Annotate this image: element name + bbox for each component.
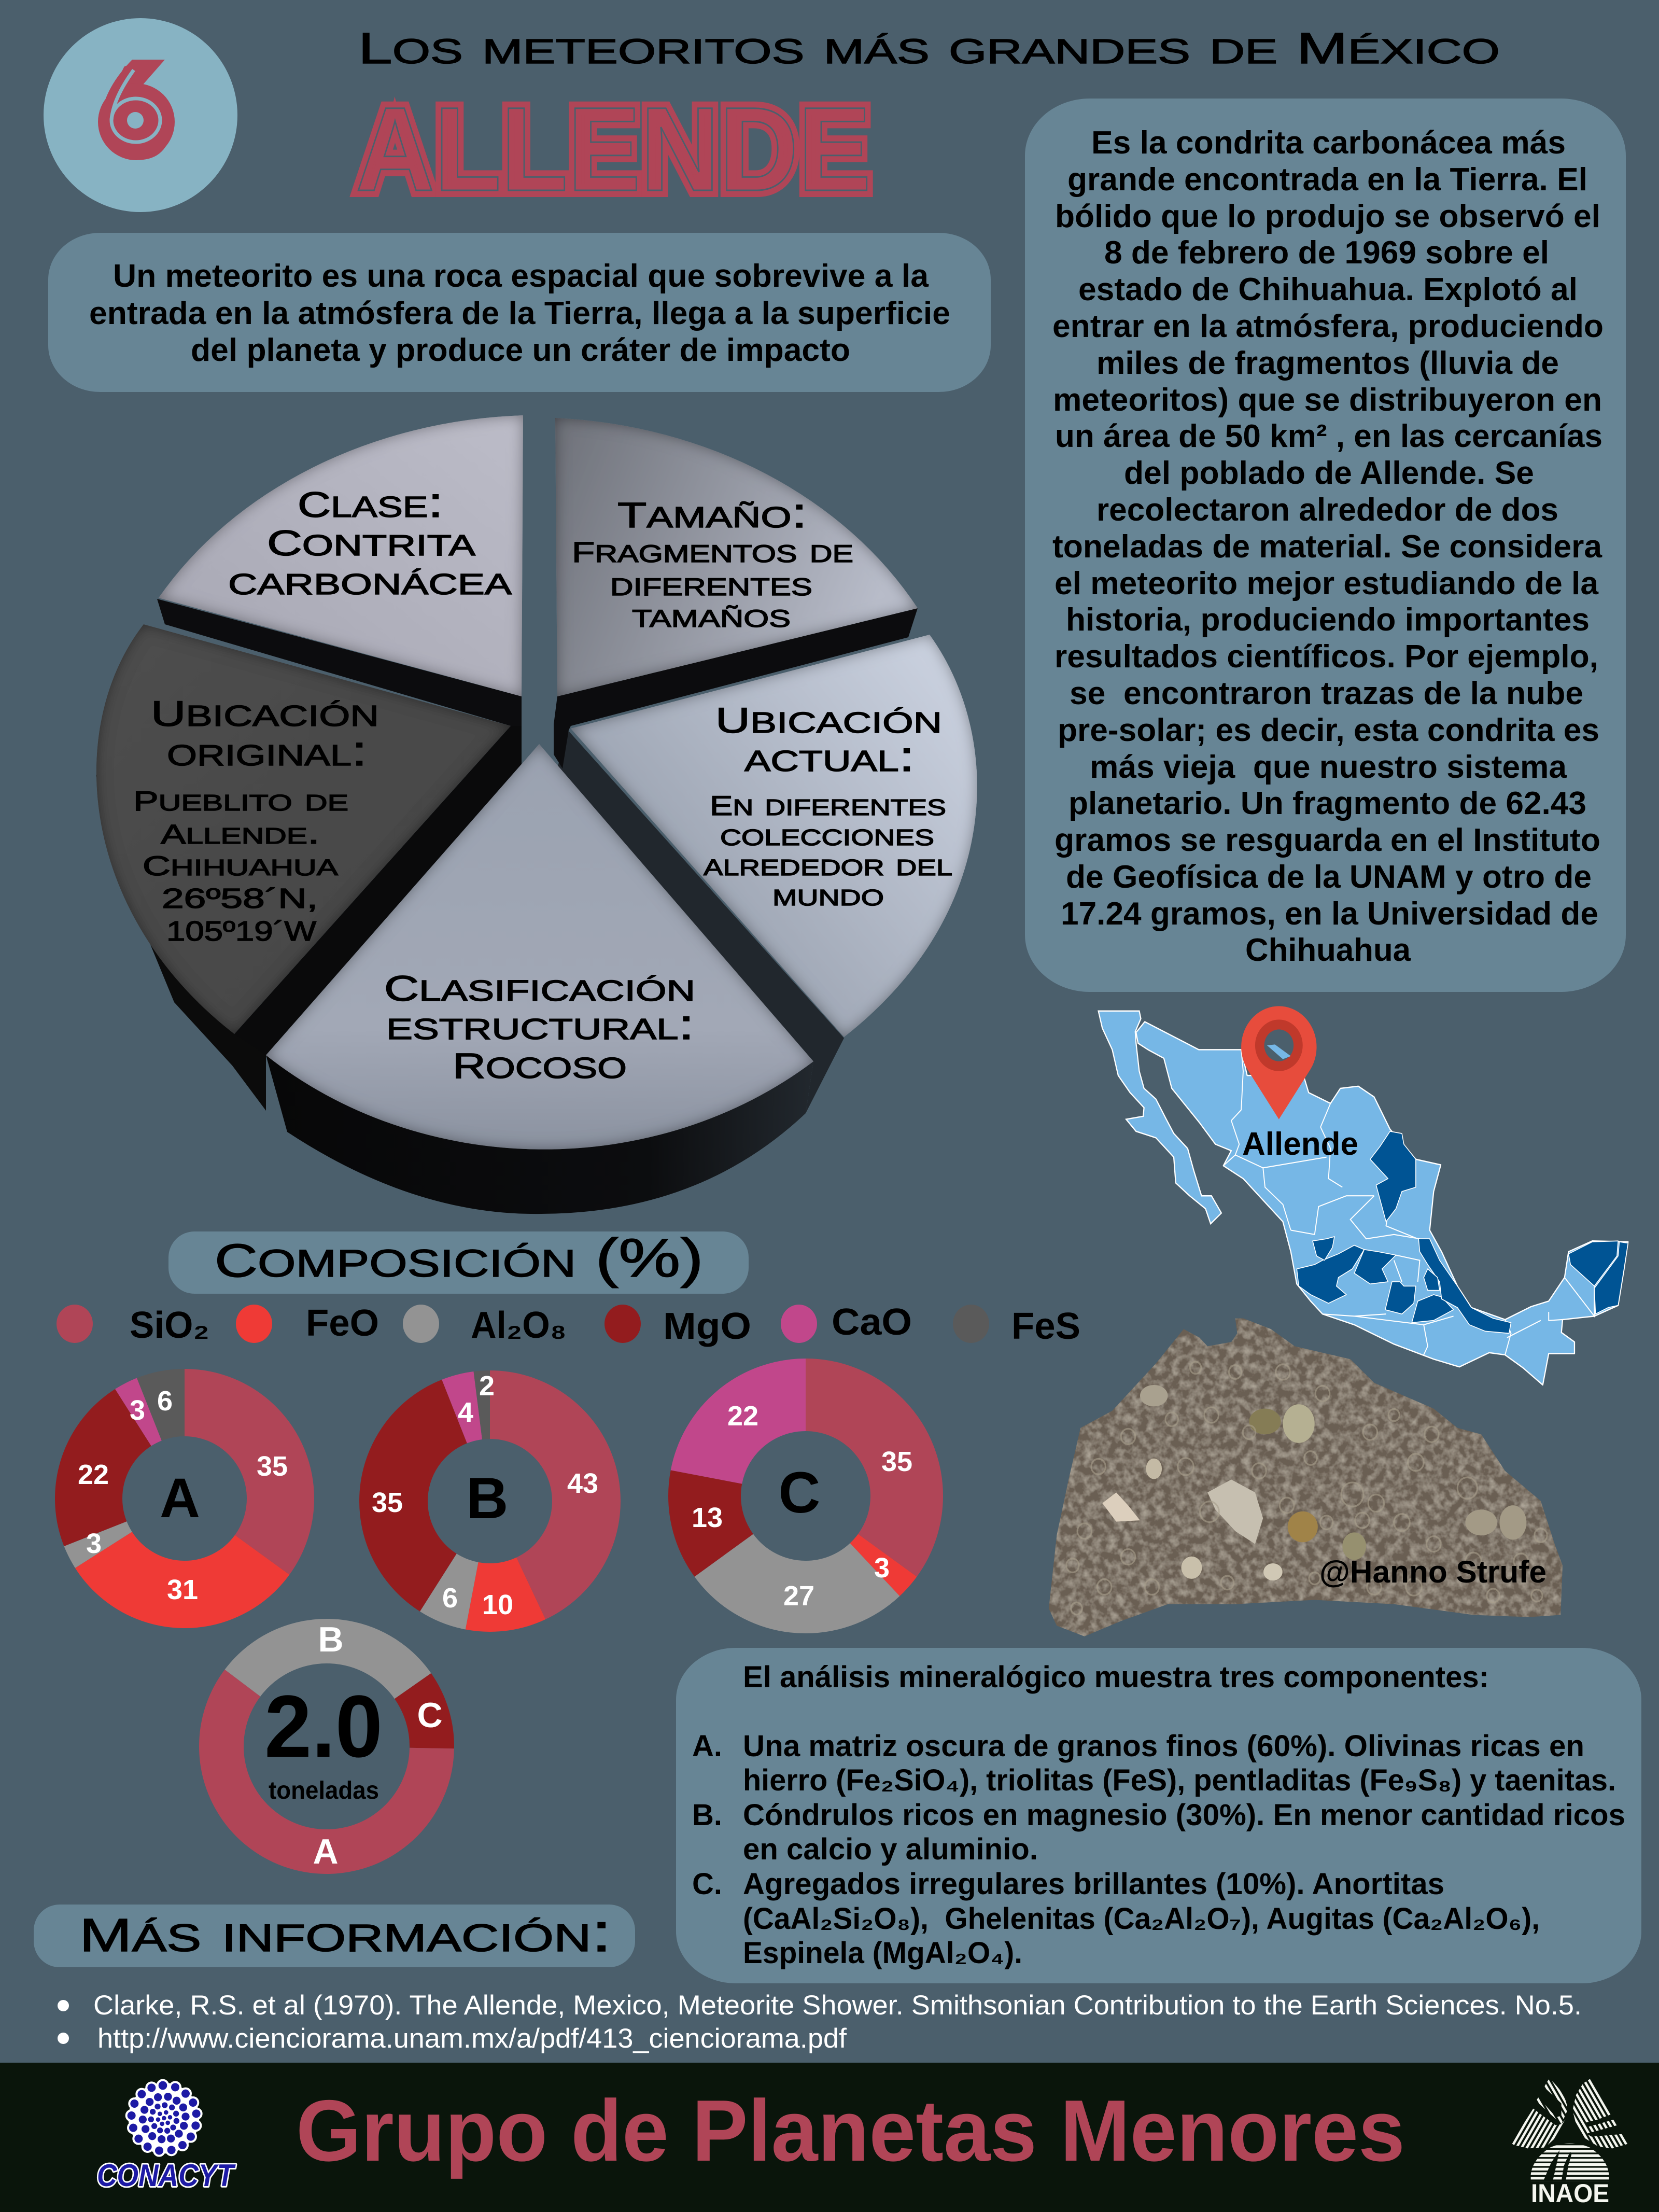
panel: definition of meteorite: [48, 233, 991, 392]
footer band: [0, 2063, 1659, 2212]
heading: más información: M ás información:: [79, 1902, 612, 1963]
panel: mineralogical analysis: hierro (Fe₂SiO₄), triolitas (FeS), pentladitas (Fe₉S₈) y taenitas.: [743, 1763, 1616, 1797]
legend: oxides: FeO: [306, 1303, 379, 1344]
panel: description of Allende: un área de 50 km² , en las cercanías: [1055, 418, 1602, 454]
chart: donut B: 6: [442, 1583, 458, 1614]
highlighted states: [1297, 1131, 1628, 1333]
slice: ubicación actual: alrededor del: [704, 846, 952, 883]
panel: description of Allende: bólido que lo produjo se observó el: [1055, 199, 1600, 234]
label: Allende: Allende: [1242, 1126, 1358, 1162]
slice: clase: Clase:: [298, 479, 443, 526]
chart: donut C: 35: [881, 1446, 912, 1477]
chart: donut A: 22: [78, 1459, 109, 1490]
slice: ubicación actual: En diferentes: [710, 786, 946, 822]
chart: donut A: 3: [86, 1528, 102, 1559]
panel: description of Allende: Es la condrita carbonácea más: [1091, 125, 1566, 161]
chart: donut A: [78, 1385, 288, 1605]
panel: description of Allende: el meteorito mejor estudiando de la: [1055, 566, 1599, 601]
chart: donut total 2.0 toneladas: B: [318, 1620, 344, 1659]
chart: donut B: 43: [567, 1468, 598, 1499]
legend: oxides: Al₂O₈: [471, 1305, 567, 1346]
Baja California peninsula: [1099, 1011, 1221, 1224]
slice: ubicación actual: actual:: [744, 733, 915, 780]
chart: donut B: B: [467, 1466, 508, 1531]
slice: tamaño: Fragmentos de: [572, 531, 853, 570]
panel: description of Allende: historia, produciendo importantes: [1066, 602, 1590, 638]
panel: description of Allende: gramos se resguarda en el Instituto: [1055, 822, 1600, 858]
slice: tamaño: Tamaño:: [617, 489, 807, 537]
legend: oxides: [57, 1301, 1080, 1347]
chart: donut B: [372, 1370, 598, 1620]
heading: composición: Composición (%): [215, 1228, 704, 1289]
slice: ubicación original: Chihuahua: [143, 846, 339, 883]
panel: mineralogical analysis: [676, 1648, 1641, 1983]
title: Los meteoritos más grandes de M éxico: [358, 19, 1500, 74]
chart: donut C: 22: [727, 1401, 758, 1432]
panel: description of Allende: 17.24 gramos, en la Universidad de: [1061, 896, 1598, 932]
slice: ubicación actual: [571, 635, 977, 1037]
panel: description of Allende: 8 de febrero de 1969 sobre el: [1104, 235, 1549, 271]
chart: donut C: 3: [874, 1552, 890, 1584]
slice: tamaño: tamaños: [632, 596, 791, 635]
chart: donut B: 35: [372, 1487, 403, 1518]
panel: description of Allende: planetario. Un fragmento de 62.43: [1068, 786, 1586, 821]
slice: clase: [159, 415, 523, 696]
slice: clasificación estructural: [266, 744, 813, 1150]
footer title: Grupo de Planetas Menores: [296, 2082, 1405, 2179]
chart: donut A: 3: [130, 1395, 145, 1426]
panel: description of Allende: pre-solar; es decir, esta condrita es: [1058, 712, 1599, 748]
map of Mexico with location pin: [1099, 1006, 1628, 1385]
logo: CONACYT: CONACYT: [97, 2158, 236, 2193]
panel: definition of meteorite: del planeta y produce un cráter de impacto: [191, 332, 850, 368]
slice: clasificación estructural: Clasificación: [384, 963, 695, 1010]
chart: donut B: 4: [458, 1397, 473, 1428]
chart: donut A: 31: [167, 1574, 198, 1605]
legend: oxides: CaO: [832, 1301, 912, 1343]
heading: ALLENDE: ALLENDE: [356, 82, 871, 216]
panel: description of Allende: resultados científicos. Por ejemplo,: [1055, 639, 1598, 675]
photo credit: @Hanno Strufe: [1319, 1555, 1546, 1589]
logo: CONACYT: [97, 2080, 236, 2193]
chart: donut A: A: [160, 1466, 200, 1529]
slice: ubicación original: [96, 624, 511, 1034]
chart: donut total 2.0 toneladas: A: [313, 1832, 339, 1871]
slice: ubicación original: original:: [167, 727, 367, 775]
chart: donut C: [692, 1395, 912, 1612]
panel: mineralogical analysis: Cóndrulos ricos en magnesio (30%). En menor cantidad ricos: [743, 1798, 1625, 1832]
slice: ubicación actual: mundo: [772, 876, 884, 913]
slice: clase: carbonácea: [228, 556, 512, 604]
panel: description of Allende: de Geofísica de la UNAM y otro de: [1066, 859, 1592, 895]
slice: ubicación actual: Ubicación: [715, 695, 942, 742]
slice: ubicación original: Allende.: [161, 815, 320, 851]
panel: mineralogical analysis: (CaAl₂Si₂O₈), Ghelenitas (Ca₂Al₂O₇), Augitas (Ca₂Al₂O₆),: [743, 1902, 1540, 1936]
state borders: [1224, 1049, 1594, 1355]
slice: clasificación estructural: Rocoso: [453, 1040, 627, 1087]
panel: mineralogical analysis: C.: [692, 1867, 722, 1901]
chart: 3D exploded pie of meteorite facts: [96, 415, 977, 1214]
chart: donut total 2.0 toneladas: C: [417, 1696, 443, 1735]
references list: Clarke, R.S. et al (1970). The Allende, Mexico, Meteorite Shower. Smithsonian Contribution to the Earth Sciences. No.5.: [93, 1990, 1582, 2021]
legend: oxides: FeS: [1011, 1306, 1080, 1347]
photo: Allende meteorite fragment: [1049, 1318, 1563, 1636]
heading: más información: [34, 1902, 635, 1967]
panel: mineralogical analysis: Agregados irregulares brillantes (10%). Anortitas: [743, 1867, 1444, 1901]
panel: description of Allende: miles de fragmentos (lluvia de: [1096, 345, 1559, 381]
heading: composición: [168, 1228, 749, 1294]
panel: definition of meteorite: entrada en la atmósfera de la Tierra, llega a la superficie: [89, 296, 950, 331]
panel: description of Allende: estado de Chihuahua. Explotó al: [1078, 272, 1578, 307]
panel: definition of meteorite: Un meteorito es una roca espacial que sobrevive a la: [113, 258, 929, 294]
icon: location pin: [1241, 1006, 1317, 1119]
slice: clase: Contrita: [267, 517, 475, 565]
chart: donut B: 2: [479, 1370, 495, 1402]
badge: number 6: 6: [98, 36, 175, 188]
chart: donut A: 6: [157, 1385, 173, 1417]
slice: ubicación original: 26º58´N,: [162, 883, 318, 914]
panel: mineralogical analysis: en calcio y aluminio.: [743, 1832, 1038, 1866]
slice: ubicación original: Ubicación: [151, 688, 379, 735]
chart: donut C: C: [779, 1460, 820, 1525]
panel: description of Allende: grande encontrada en la Tierra. El: [1067, 162, 1587, 198]
panel: mineralogical analysis: El análisis mineralógico muestra tres componentes:: [743, 1660, 1489, 1694]
chart: donut B: 10: [482, 1589, 513, 1620]
chart: donut total 2.0 toneladas: [180, 1600, 473, 1893]
chart: donut total 2.0 toneladas: 2.0: [264, 1677, 383, 1776]
panel: mineralogical analysis: A.: [692, 1729, 722, 1763]
chart: donut C: 13: [692, 1502, 723, 1533]
chart: donut C: 27: [783, 1580, 814, 1612]
pie extrusion sides: [96, 599, 918, 1214]
references list: http://www.cienciorama.unam.mx/a/pdf/413_cienciorama.pdf: [97, 2023, 847, 2054]
mainland: [1136, 1021, 1628, 1385]
panel: description of Allende: del poblado de Allende. Se: [1124, 455, 1534, 491]
chart: donut A: 35: [257, 1451, 288, 1482]
panel: description of Allende: [1025, 99, 1626, 992]
panel: mineralogical analysis: Espinela (MgAl₂O₄).: [743, 1936, 1022, 1970]
panel: description of Allende: recolectaron alrededor de dos: [1096, 492, 1558, 528]
logo: INAOE: INAOE: [1531, 2179, 1609, 2208]
panel: description of Allende: más vieja que nuestro sistema: [1090, 749, 1567, 785]
references list: [58, 1990, 1582, 2054]
panel: mineralogical analysis: Una matriz oscura de granos finos (60%). Olivinas ricas en: [743, 1729, 1584, 1763]
panel: description of Allende: entrar en la atmósfera, produciendo: [1052, 309, 1604, 344]
panel: description of Allende: toneladas de material. Se considera: [1052, 529, 1602, 565]
slice: ubicación original: Pueblito de: [133, 781, 348, 818]
legend: oxides: MgO: [663, 1306, 751, 1347]
slice: tamaño: [555, 418, 918, 696]
logo: INAOE: [1511, 2078, 1629, 2208]
legend: oxides: SiO₂: [130, 1305, 209, 1346]
chart: donut total 2.0 toneladas: toneladas: [269, 1777, 379, 1804]
heading: ALLENDE: ALLENDE: [356, 82, 871, 216]
badge: number 6: [44, 18, 237, 212]
panel: description of Allende: meteoritos) que se distribuyeron en: [1053, 382, 1602, 418]
panel: description of Allende: se encontraron trazas de la nube: [1070, 676, 1583, 711]
panel: description of Allende: Chihuahua: [1245, 932, 1411, 968]
slice: clasificación estructural: estructural:: [386, 1001, 694, 1048]
slice: ubicación original: 105º19´W: [166, 916, 316, 947]
panel: mineralogical analysis: B.: [692, 1798, 722, 1832]
slice: ubicación actual: colecciones: [720, 816, 934, 852]
slice: tamaño: diferentes: [610, 564, 812, 603]
